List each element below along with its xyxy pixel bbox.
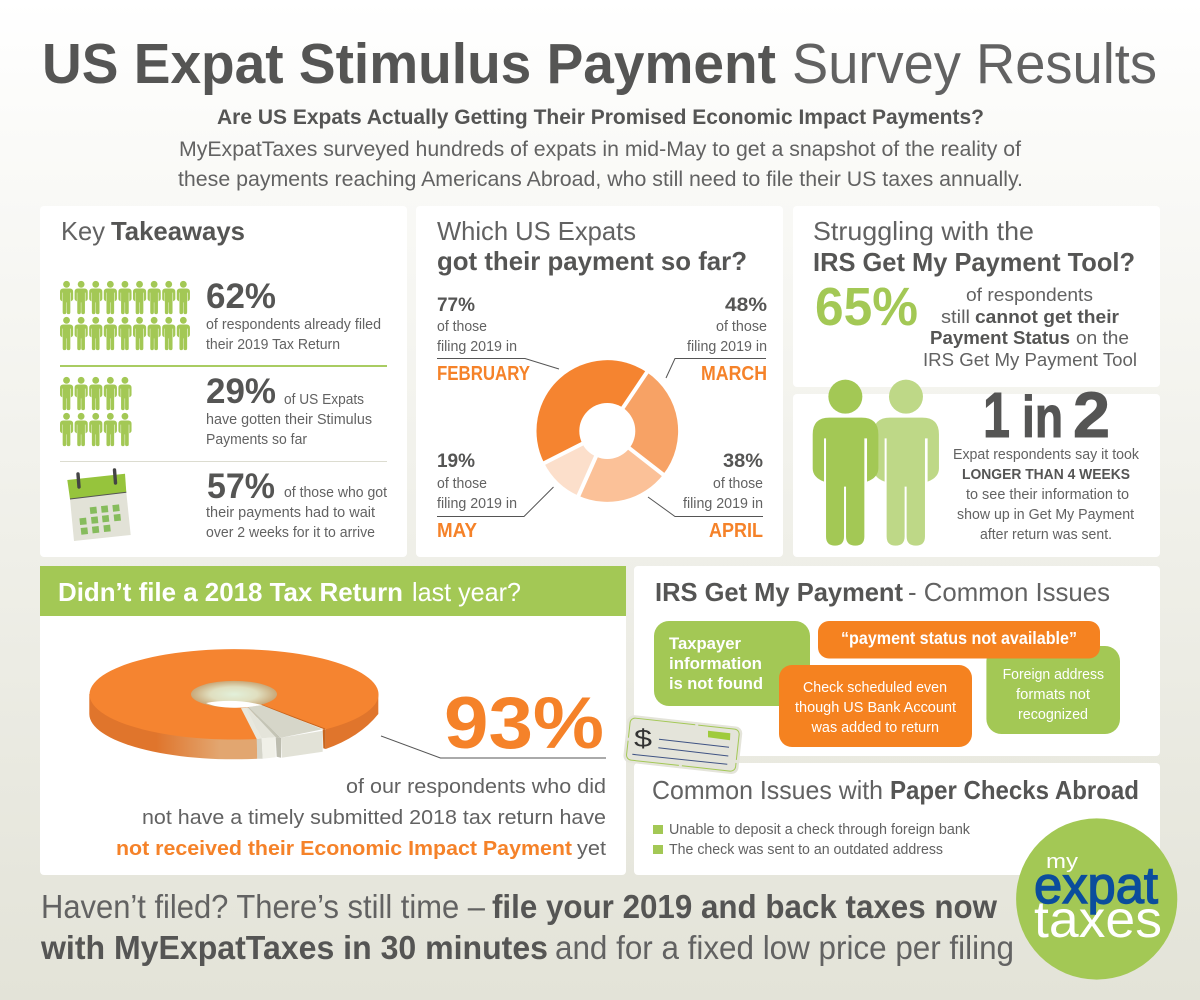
callout: april: of those <box>713 476 763 492</box>
bubble: check scheduled <box>779 665 972 747</box>
text: payment status: of respondents <box>966 285 1093 305</box>
callout: march: of those <box>716 319 767 335</box>
header band: last year? <box>412 577 521 607</box>
heading: key takeaways: Takeaways <box>111 216 245 246</box>
text: payment status: IRS Get My Payment Tool <box>923 350 1137 370</box>
logo: my expat taxes: my <box>1046 851 1078 873</box>
text: payment status <box>923 285 1137 370</box>
footer call to action: and for a fixed low price per filing <box>555 929 1014 966</box>
bubble: foreign address: formats not <box>1016 687 1090 703</box>
bubble: check scheduled: though US Bank Account <box>795 700 956 716</box>
icon: paper check: $ <box>634 725 652 753</box>
panel: 1 in 2 <box>793 379 1160 557</box>
bullet list <box>653 822 971 858</box>
heading: key takeaways: Key <box>61 216 105 246</box>
heading: struggling <box>813 216 1135 277</box>
stat: 1 in 2: in <box>1022 385 1063 450</box>
callout: may <box>437 451 554 542</box>
heading: common issues <box>655 577 1110 607</box>
callout: march <box>666 295 767 385</box>
intro text: these payments reaching Americans Abroad, who still need to file their US taxes annually. <box>178 167 1023 191</box>
stat: 1 in 2: 2 <box>1073 379 1110 451</box>
stat: 57 percent: over 2 weeks for it to arrive <box>206 525 375 541</box>
heading: paper checks: Common Issues with <box>652 775 883 805</box>
stat: 29 percent: 29% <box>206 372 276 411</box>
panel: paper checks abroad <box>634 763 1160 875</box>
icon: calendar <box>67 470 131 541</box>
heading: struggling: Struggling with the <box>813 216 1034 246</box>
panel: key takeaways <box>40 206 407 557</box>
footer call to action: Haven’t filed? There’s still time – <box>41 888 486 925</box>
callout: february: 77% <box>437 295 475 316</box>
stat: 57 percent: their payments had to wait <box>206 505 375 521</box>
stat: 65 percent: 65% <box>815 277 918 337</box>
title: Survey Results <box>792 32 1157 96</box>
heading: struggling: IRS Get My Payment Tool? <box>813 247 1135 277</box>
stat: 57 percent: of those who got <box>284 485 387 501</box>
text: longer than 4 weeks: Expat respondents say it took <box>953 447 1140 463</box>
stat: 93 percent: 93% <box>444 683 604 764</box>
stat: 29 percent: have gotten their Stimulus <box>206 412 372 428</box>
heading: common issues: - Common Issues <box>908 577 1110 607</box>
heading: which expats <box>437 216 747 276</box>
heading: which expats: Which US Expats <box>437 216 636 246</box>
stat: 93 percent <box>381 683 606 764</box>
intro text: MyExpatTaxes surveyed hundreds of expats in mid-May to get a snapshot of the reality of <box>179 137 1021 161</box>
text: payment status: on the <box>1076 328 1129 348</box>
stat: 62 percent: 62% <box>206 277 276 316</box>
stat: 1 in 2: 1 <box>983 379 1010 451</box>
bubble: foreign address: Foreign address <box>1003 667 1104 683</box>
stat: 57 percent: 57% <box>207 467 275 506</box>
callout: may: of those <box>437 476 487 492</box>
callout: may: MAY <box>437 520 478 542</box>
header band <box>40 566 626 616</box>
header band: Didn’t file a 2018 Tax Return <box>58 577 403 607</box>
icon: 18 people <box>60 281 190 350</box>
footer call to action <box>40 888 1014 966</box>
icon: 10 people <box>60 377 132 446</box>
intro text <box>178 105 1023 191</box>
bubble: foreign address <box>986 646 1120 734</box>
bubble: taxpayer information: Taxpayer <box>669 635 742 653</box>
stat: 29 percent: Payments so far <box>206 432 307 448</box>
panel: common issues <box>634 566 1160 756</box>
footer call to action: file your 2019 and back taxes now <box>492 888 997 925</box>
callout: february: FEBRUARY <box>437 363 531 385</box>
text: payment status: Payment Status <box>930 328 1070 348</box>
bubble: taxpayer information <box>654 621 810 706</box>
heading: paper checks: Paper Checks Abroad <box>890 775 1139 805</box>
bubble: check scheduled: Check scheduled even <box>803 680 947 696</box>
text: respondents without 2018 return: not received their Economic Impact Payment <box>116 838 572 860</box>
text: longer than 4 weeks: to see their information to <box>966 487 1129 503</box>
bullet list: The check was sent to an outdated address <box>669 842 943 858</box>
text: respondents without 2018 return <box>116 776 606 860</box>
heading: paper checks <box>652 775 1139 805</box>
bubble: payment status not available <box>818 621 1100 658</box>
callout: february <box>437 295 559 385</box>
text: longer than 4 weeks: after return was sent. <box>980 527 1112 543</box>
3d pie chart <box>89 649 379 759</box>
text: respondents without 2018 return: yet <box>577 838 606 860</box>
panel: get my payment tool <box>793 206 1160 387</box>
icon: light person <box>873 380 939 546</box>
bubble: foreign address: recognized <box>1018 707 1088 723</box>
bubble: taxpayer information: is not found <box>669 675 763 693</box>
bubble: taxpayer information: information <box>669 655 762 673</box>
heading: which expats: got their payment so far? <box>437 246 747 276</box>
logo: my expat taxes: taxes <box>1034 891 1162 949</box>
callout: april: filing 2019 in <box>683 496 763 512</box>
callout: may: filing 2019 in <box>437 496 517 512</box>
footer call to action: with MyExpatTaxes in 30 minutes <box>40 929 548 966</box>
logo: my expat taxes: expat <box>1034 857 1159 915</box>
panel: which expats got payment <box>416 206 783 557</box>
stat: 57 percent <box>206 467 387 541</box>
icon: dark person <box>813 380 878 546</box>
callout: april <box>648 451 763 542</box>
callout: may: 19% <box>437 451 475 472</box>
stat: 62 percent: their 2019 Tax Return <box>206 337 340 353</box>
intro text: Are US Expats Actually Getting Their Promised Economic Impact Payments? <box>217 105 984 129</box>
text: longer than 4 weeks <box>953 447 1140 543</box>
callout: april: APRIL <box>709 520 763 542</box>
donut chart <box>536 360 678 502</box>
callout: march: 48% <box>725 295 767 316</box>
text: longer than 4 weeks: show up in Get My Payment <box>957 507 1134 523</box>
panel: 2018 tax return <box>40 566 626 875</box>
callout: march: MARCH <box>701 363 767 385</box>
icon: paper check <box>623 715 743 775</box>
stat: 1 in 2 <box>983 379 1110 451</box>
bubble: payment status not available: “payment status not available” <box>841 628 1077 648</box>
stat: 29 percent: of US Expats <box>284 392 364 408</box>
stat: 62 percent: of respondents already filed <box>206 317 381 333</box>
text: respondents without 2018 return: of our respondents who did <box>346 776 606 798</box>
stat: 62 percent <box>206 277 381 353</box>
callout: march: filing 2019 in <box>687 339 767 355</box>
bullet list: Unable to deposit a check through foreign bank <box>669 822 971 838</box>
text: longer than 4 weeks: LONGER THAN 4 WEEKS <box>962 467 1130 483</box>
text: payment status: still <box>941 307 970 327</box>
stat: 29 percent <box>206 372 372 448</box>
bubble: check scheduled: was added to return <box>811 720 939 736</box>
text: respondents without 2018 return: not have a timely submitted 2018 tax return have <box>142 807 606 829</box>
logo: my expat taxes <box>1016 818 1177 980</box>
text: payment status: cannot get their <box>975 307 1119 327</box>
callout: april: 38% <box>723 451 763 472</box>
callout: february: filing 2019 in <box>437 339 517 355</box>
title <box>42 32 1157 96</box>
title: US Expat Stimulus Payment <box>42 32 776 96</box>
callout: february: of those <box>437 319 487 335</box>
heading: common issues: IRS Get My Payment <box>655 577 903 607</box>
